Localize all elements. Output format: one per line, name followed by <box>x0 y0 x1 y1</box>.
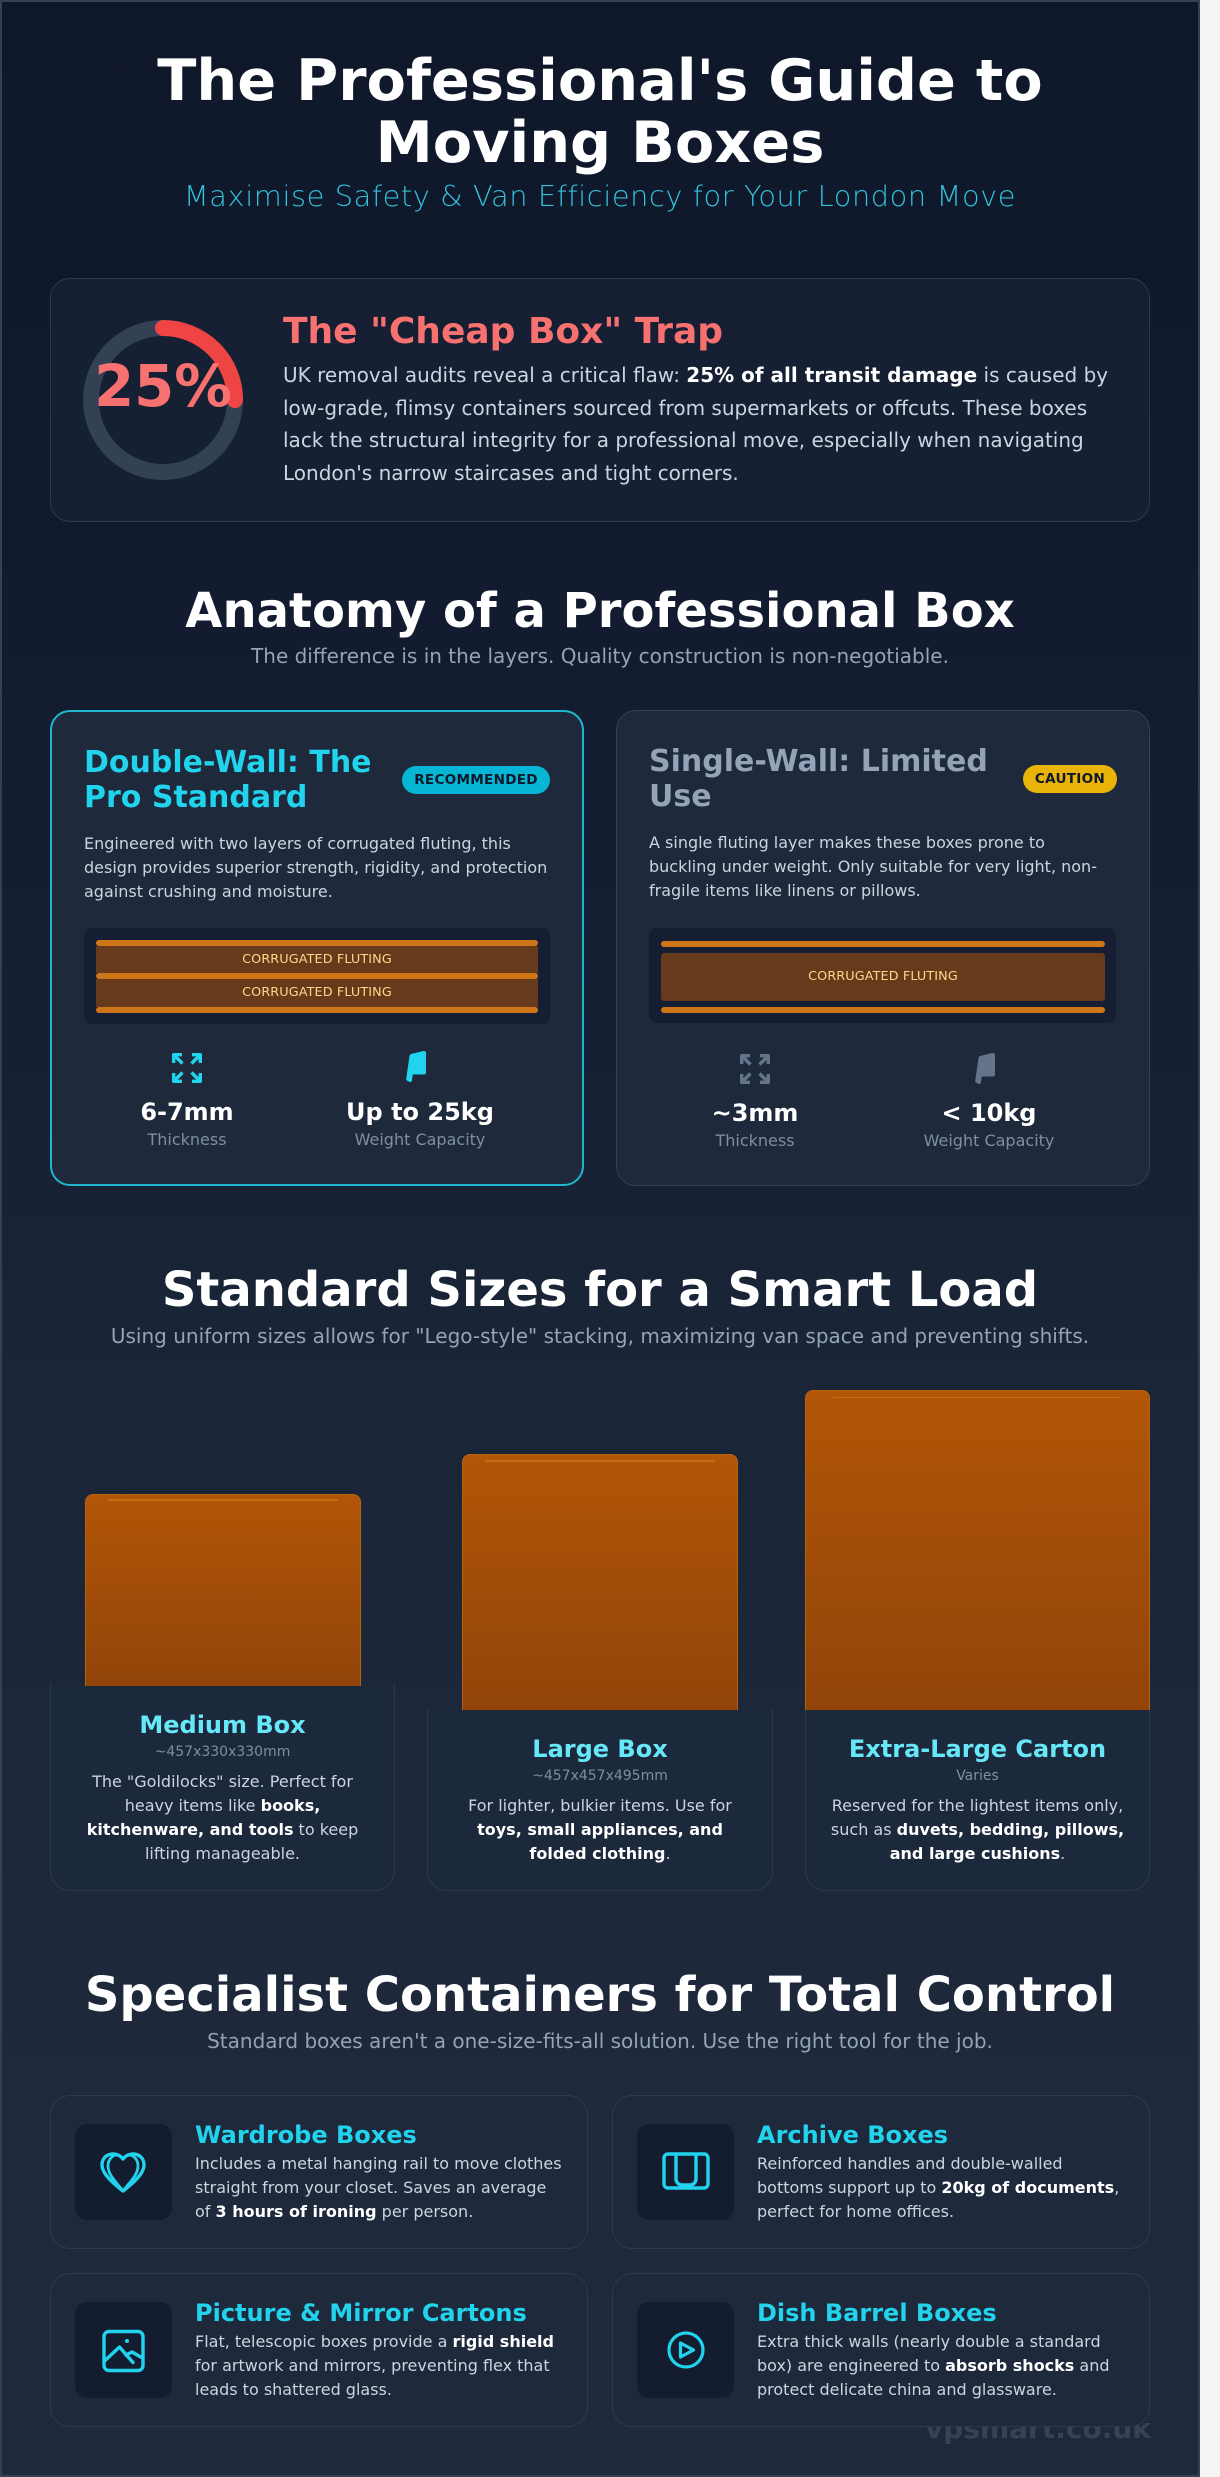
diagram: single-wall layers <box>649 928 1116 1023</box>
text: dish barrel boxes <box>757 2332 1110 2398</box>
watermark: vpsmart.co.uk <box>925 2412 1151 2445</box>
subheading: specialist containers: Standard boxes aren't a one-size-fits-all solution. Use the right tool for the job. <box>207 2029 993 2053</box>
badge: caution: CAUTION <box>1035 771 1105 787</box>
heading: extra-large carton: Extra-Large Carton <box>849 1735 1106 1763</box>
main title <box>157 47 1043 176</box>
text: archive boxes <box>757 2154 1119 2220</box>
heading: double-wall: Double-Wall: The <box>84 744 372 780</box>
text: picture and mirror cartons <box>195 2332 554 2398</box>
panel: dish barrel boxes <box>612 2273 1150 2427</box>
body text: single-wall <box>649 832 1097 900</box>
stat: weight capacity <box>346 1051 494 1148</box>
text: dish barrel boxes: Extra thick walls (nearly double a standard <box>757 2332 1101 2350</box>
heading: wardrobe boxes: Wardrobe Boxes <box>195 2121 417 2149</box>
icon: dish barrel <box>637 2302 734 2398</box>
heading: archive boxes: Archive Boxes <box>757 2121 948 2149</box>
body text: double-wall: design provides superior strength, rigidity, and protection <box>84 858 547 876</box>
body text: cheap box trap: low-grade, flimsy containers sourced from supermarkets or offcuts. These boxes <box>283 396 1087 420</box>
illustration: large box <box>462 1454 738 1710</box>
icon: weight <box>975 1053 995 1084</box>
text: medium box: lifting manageable. <box>145 1844 300 1862</box>
main title: The Professional's Guide to <box>157 47 1043 114</box>
text: medium box: kitchenware, and tools to keep <box>87 1820 358 1838</box>
text: picture and mirror cartons: for artwork and mirrors, preventing flex that <box>195 2356 550 2374</box>
dimensions: medium box: ~457x330x330mm <box>155 1744 290 1760</box>
heading: medium box: Medium Box <box>139 1711 306 1739</box>
text: archive boxes: bottoms support up to 20kg of documents, <box>757 2178 1119 2196</box>
text: medium box: heavy items like books, <box>125 1796 320 1814</box>
label: weight capacity: Weight Capacity <box>355 1130 485 1148</box>
icon: heart hanger <box>75 2124 172 2220</box>
panel: medium box <box>50 1494 395 1891</box>
value: 6-7mm: 6-7mm <box>140 1098 234 1126</box>
text: picture and mirror cartons: Flat, telescopic boxes provide a rigid shield <box>195 2332 554 2350</box>
text: wardrobe boxes: of 3 hours of ironing per person. <box>195 2202 473 2220</box>
text: wardrobe boxes: Includes a metal hanging rail to move clothes <box>195 2154 562 2172</box>
heading: single-wall <box>649 744 988 814</box>
stat: weight capacity <box>924 1053 1054 1150</box>
label: thickness: Thickness <box>715 1130 795 1150</box>
heading: cheap box trap: The "Cheap Box" Trap <box>283 310 723 352</box>
icon: weight <box>406 1051 426 1082</box>
diagram: double-wall layers <box>84 928 550 1024</box>
body text: cheap box trap: lack the structural integrity for a professional move, especially when navigating <box>283 428 1084 452</box>
main title: Moving Boxes <box>376 109 824 176</box>
text: extra-large carton: such as duvets, bedding, pillows, <box>831 1820 1124 1838</box>
text: wardrobe boxes: straight from your closet. Saves an average <box>195 2178 546 2196</box>
layer: fluting <box>661 953 1105 1001</box>
text: large box <box>468 1796 732 1862</box>
badge: recommended: RECOMMENDED <box>414 772 538 788</box>
body text: cheap box trap: London's narrow staircases and tight corners. <box>283 461 739 485</box>
panel: single-wall <box>616 710 1150 1186</box>
text: dish barrel boxes: protect delicate china and glassware. <box>757 2380 1057 2398</box>
icon: picture frame <box>75 2302 172 2398</box>
text: large box: For lighter, bulkier items. Use for <box>468 1796 732 1814</box>
panel: archive boxes <box>612 2095 1150 2249</box>
layer: fluting one <box>96 946 538 973</box>
icon: archive box <box>637 2124 734 2220</box>
layer: fluting one: CORRUGATED FLUTING <box>242 952 392 967</box>
text: extra-large carton: and large cushions. <box>890 1844 1065 1862</box>
text: large box: toys, small appliances, and <box>477 1820 723 1838</box>
text: picture and mirror cartons: leads to shattered glass. <box>195 2380 392 2398</box>
body text: double-wall: against crushing and moisture. <box>84 882 333 900</box>
dimensions: large box: ~457x457x495mm <box>532 1768 668 1784</box>
subheading: anatomy: The difference is in the layers. Quality construction is non-negotiable. <box>251 644 949 668</box>
panel: extra-large carton <box>805 1390 1150 1891</box>
panel: cheap box trap <box>50 278 1150 522</box>
body text: cheap box trap <box>283 363 1108 485</box>
text: medium box <box>87 1772 358 1862</box>
heading: double-wall: Pro Standard <box>84 780 307 814</box>
layer: fluting: CORRUGATED FLUTING <box>808 969 958 984</box>
stat: thickness <box>140 1053 234 1148</box>
text: extra-large carton: Reserved for the lightest items only, <box>832 1796 1123 1814</box>
stat: thickness <box>712 1054 798 1150</box>
panel: double-wall <box>50 710 584 1186</box>
text: archive boxes: perfect for home offices. <box>757 2202 954 2220</box>
label: thickness: Thickness <box>147 1130 227 1148</box>
text: extra-large carton <box>831 1796 1124 1862</box>
text: medium box: The "Goldilocks" size. Perfect for <box>92 1772 353 1790</box>
chart: 25 percent ring <box>83 320 243 480</box>
subtitle: Maximise Safety & Van Efficiency for Your London Move <box>184 179 1016 213</box>
heading: large box: Large Box <box>532 1735 668 1763</box>
layer: fluting two <box>96 979 538 1007</box>
body text: double-wall: Engineered with two layers of corrugated fluting, this <box>84 834 511 852</box>
heading: anatomy: Anatomy of a Professional Box <box>185 583 1015 639</box>
badge: recommended <box>402 766 550 794</box>
panel: picture and mirror cartons <box>50 2273 588 2427</box>
panel: large box <box>427 1454 773 1891</box>
value: up to 25kg: Up to 25kg <box>346 1098 494 1126</box>
illustration: extra-large carton <box>805 1390 1150 1710</box>
icon: expand arrows <box>740 1054 770 1084</box>
body text: single-wall: A single fluting layer makes these boxes prone to <box>649 832 1045 852</box>
text: large box: folded clothing. <box>529 1844 671 1862</box>
heading: picture and mirror cartons: Picture & Mirror Cartons <box>195 2299 527 2327</box>
badge: caution <box>1023 765 1117 793</box>
heading: single-wall: Use <box>649 778 712 814</box>
text: wardrobe boxes <box>195 2154 562 2220</box>
heading: specialist containers: Specialist Containers for Total Control <box>85 1967 1115 2023</box>
dimensions: extra-large carton: Varies <box>956 1768 999 1784</box>
value: under 10kg: < 10kg <box>941 1099 1036 1127</box>
body text: double-wall <box>84 834 547 900</box>
heading: single-wall: Single-Wall: Limited <box>649 744 988 778</box>
body text: cheap box trap: UK removal audits reveal a critical flaw: 25% of all transit damage is caused by <box>283 363 1108 387</box>
body text: single-wall: fragile items like linens or pillows. <box>649 880 921 900</box>
label: weight capacity: Weight Capacity <box>924 1130 1054 1150</box>
heading: dish barrel boxes: Dish Barrel Boxes <box>757 2299 997 2327</box>
icon: expand arrows <box>172 1053 202 1083</box>
panel: wardrobe boxes <box>50 2095 588 2249</box>
layer: fluting two: CORRUGATED FLUTING <box>242 985 392 1000</box>
value: 3mm: ~3mm <box>712 1099 798 1127</box>
illustration: medium box <box>85 1494 361 1686</box>
text: dish barrel boxes: box) are engineered to absorb shocks and <box>757 2356 1110 2374</box>
heading: double-wall <box>84 744 372 814</box>
text: archive boxes: Reinforced handles and double-walled <box>757 2154 1063 2172</box>
body text: single-wall: buckling under weight. Only suitable for very light, non- <box>649 856 1097 876</box>
heading: standard sizes: Standard Sizes for a Smart Load <box>162 1262 1038 1318</box>
subheading: standard sizes: Using uniform sizes allows for "Lego-style" stacking, maximizing van space and preventing shifts. <box>111 1324 1089 1348</box>
stat: 25%: 25% <box>94 353 232 420</box>
